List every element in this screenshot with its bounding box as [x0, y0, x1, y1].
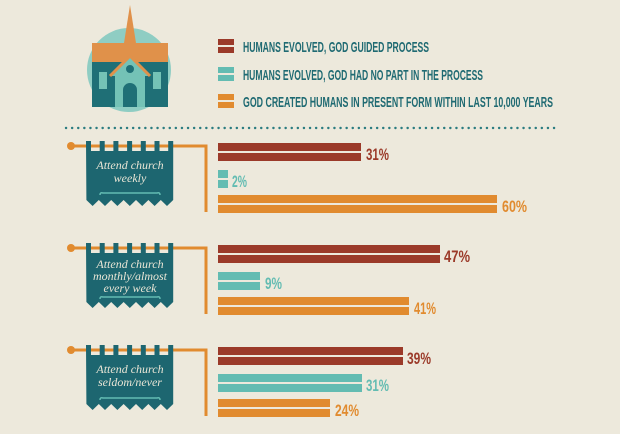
legend — [218, 39, 553, 111]
banner: monthly — [67, 243, 206, 314]
group: attend weekly — [67, 141, 527, 216]
banner: weekly: weekly — [114, 171, 147, 185]
bars: weekly — [218, 143, 527, 216]
banner: seldom — [67, 345, 206, 416]
group: attend seldom — [67, 345, 431, 420]
banner: weekly: Attend church — [95, 158, 164, 172]
icon: church — [87, 5, 171, 112]
bars: seldom: 39% — [407, 349, 431, 368]
banner: seldom: Attend church — [95, 362, 164, 376]
bars: seldom: 24% — [335, 401, 359, 420]
bars: monthly: 9% — [265, 274, 282, 293]
bars: seldom: 31% — [366, 376, 389, 395]
banner: monthly: Attend church — [95, 257, 164, 271]
banner: monthly: every week — [104, 281, 157, 295]
bars: weekly: 2% — [232, 172, 247, 191]
bars: monthly: 47% — [444, 247, 470, 266]
bars: monthly — [218, 245, 470, 318]
bars: seldom — [218, 347, 431, 420]
banner: weekly — [67, 141, 206, 212]
banner: seldom: seldom/never — [98, 375, 162, 389]
bars: monthly: 41% — [414, 299, 436, 318]
banner: monthly: monthly/almost — [93, 269, 168, 283]
legend: HUMANS EVOLVED, GOD GUIDED PROCESS — [243, 39, 429, 56]
bars: weekly: 31% — [366, 145, 389, 164]
bars: weekly: 60% — [502, 197, 527, 216]
group: attend monthly — [67, 243, 470, 318]
